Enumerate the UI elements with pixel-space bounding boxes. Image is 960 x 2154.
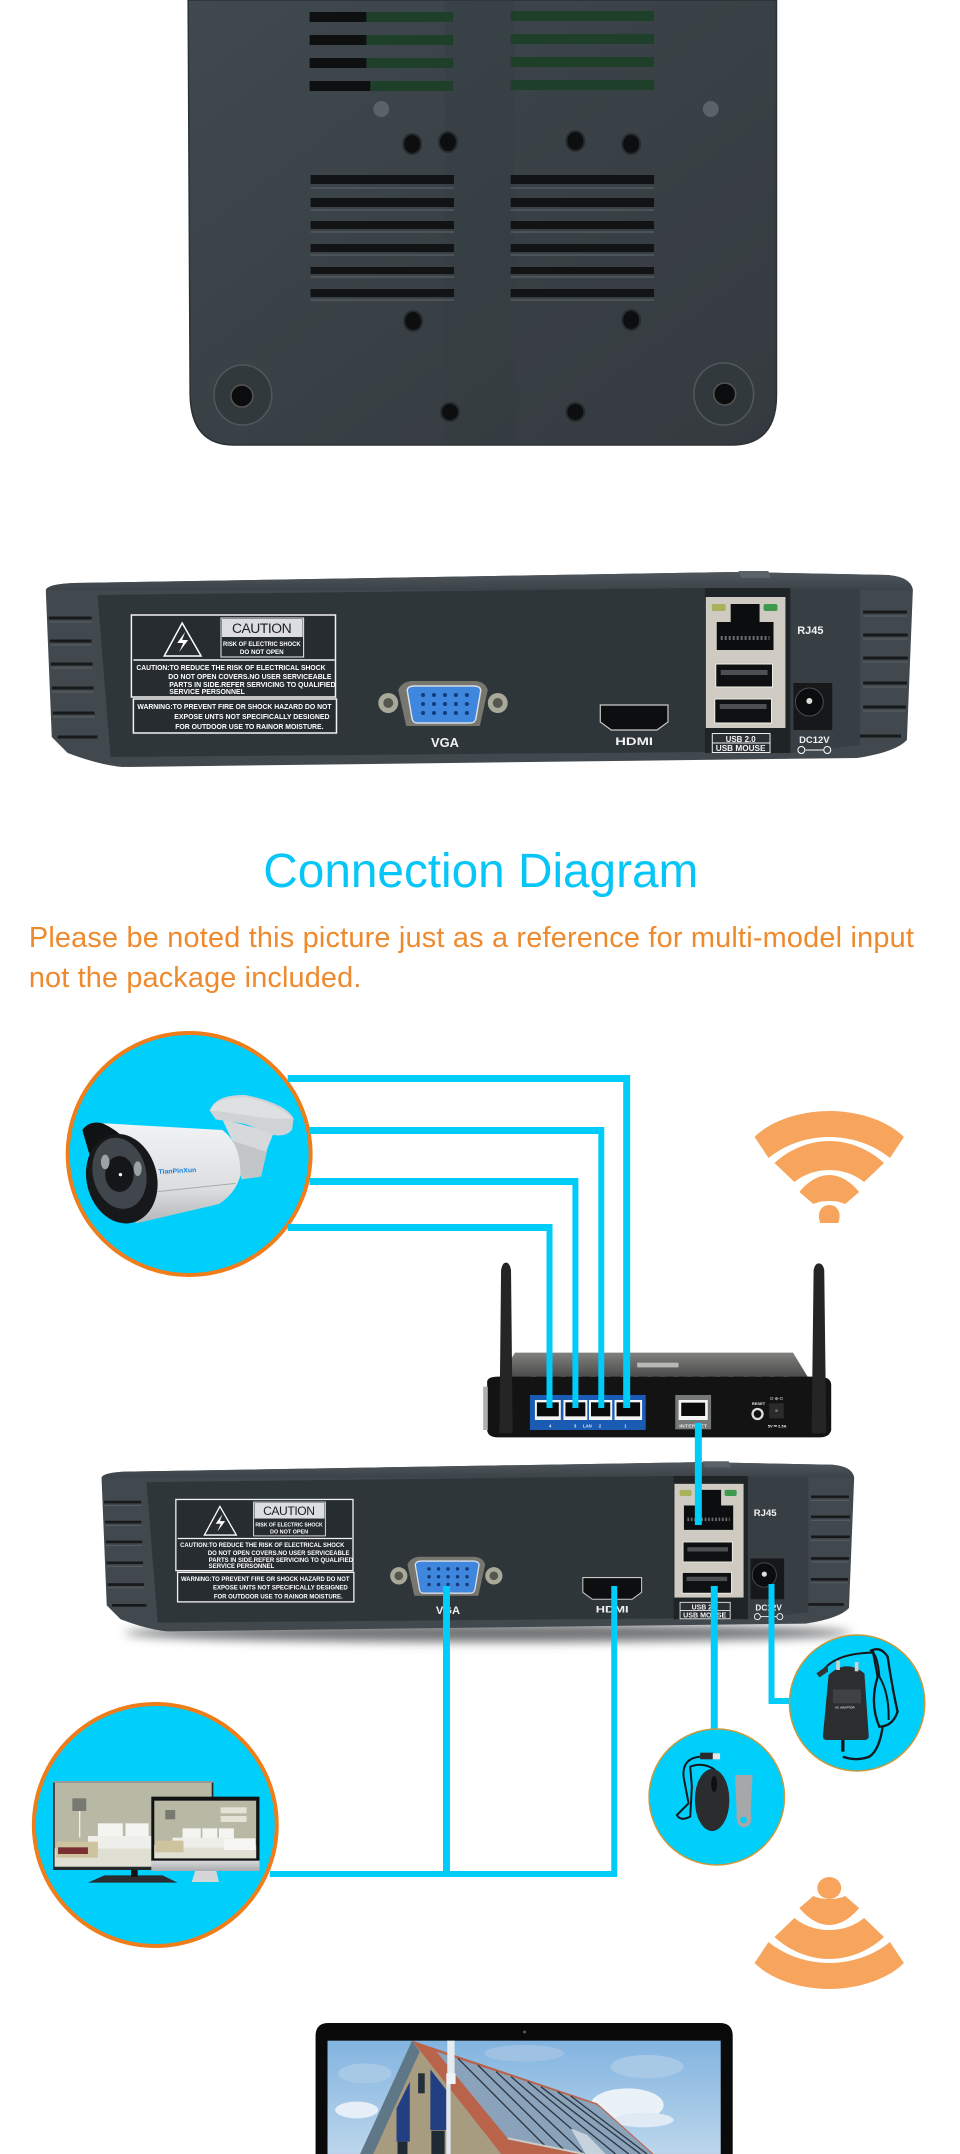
icon: bullet camera	[77, 1095, 294, 1231]
antenna left	[499, 1263, 513, 1433]
panel: NVR rear view	[46, 571, 913, 767]
DC 12V label: DC12V	[755, 1604, 782, 1613]
camera brand logo: TianPinXun	[158, 1167, 196, 1176]
rubber feet	[214, 363, 754, 425]
icon: wifi signal top	[755, 1111, 904, 1223]
DC 12V label	[798, 735, 831, 754]
HDMI label: HDMI	[615, 736, 653, 748]
upper vents	[310, 11, 654, 91]
caution label: PARTS IN SIDE.REFER SERVICING TO QUALIFIED	[169, 682, 335, 689]
caution label: DO NOT OPEN COVERS.NO USER SERVICEABLE	[168, 674, 332, 681]
caution label: DO NOT OPEN	[240, 649, 284, 656]
icon: monitors	[53, 1781, 259, 1883]
right grip	[807, 1497, 850, 1604]
mounting pegs	[373, 101, 719, 117]
caution label: WARNING:TO PREVENT FIRE OR SHOCK HAZARD DO NOT	[181, 1577, 350, 1583]
left grip	[104, 1502, 146, 1605]
VGA port	[390, 1557, 502, 1596]
reset and power: RESET	[752, 1401, 766, 1406]
antenna right	[812, 1263, 826, 1433]
note text	[29, 922, 914, 994]
caution label	[131, 615, 336, 733]
icon: wifi signal bottom	[755, 1877, 904, 1989]
LAN ports: LAN	[583, 1424, 592, 1429]
panel: NVR rear view in diagram	[102, 1461, 854, 1631]
USB label: USB 2.0	[692, 1605, 718, 1612]
reset and power: O-⊕-O	[770, 1396, 784, 1401]
caution label: DO NOT OPEN COVERS.NO USER SERVICEABLE	[208, 1551, 350, 1557]
back plate	[98, 588, 705, 757]
back plate	[146, 1476, 674, 1623]
caution label: FOR OUTDOOR USE TO RAINOR MOISTURE.	[214, 1594, 343, 1600]
USB cable	[711, 1586, 718, 1729]
USB label: USB MOUSE	[716, 744, 766, 753]
reset and power	[752, 1396, 787, 1429]
power socket	[793, 683, 832, 730]
monitor circle	[34, 1704, 277, 1946]
screen photo	[328, 2041, 721, 2154]
camera circle	[68, 1033, 311, 1275]
USB label: USB MOUSE	[683, 1612, 727, 1620]
VGA label: VGA	[436, 1605, 460, 1617]
panel: NVR shadow	[124, 1624, 851, 1642]
RJ45 label: RJ45	[754, 1508, 777, 1519]
caution label: RISK OF ELECTRIC SHOCK	[255, 1522, 323, 1528]
screw holes	[403, 131, 640, 421]
left grip	[49, 618, 98, 737]
caution label: CAUTION:TO REDUCE THE RISK OF ELECTRICAL SHOCK	[136, 665, 326, 672]
LAN ports	[530, 1395, 646, 1430]
power adapter circle	[789, 1635, 925, 1771]
caution label: PARTS IN SIDE.REFER SERVICING TO QUALIFIED	[209, 1558, 354, 1564]
LAN ports: 3	[574, 1424, 577, 1429]
caution label: CAUTION	[263, 1504, 315, 1518]
right grip	[858, 612, 908, 736]
port plate	[674, 1484, 744, 1598]
note text: Please be noted this picture just as a reference for multi-model input	[29, 922, 914, 954]
LAN ports: 4	[549, 1424, 552, 1429]
LAN ports: 2	[599, 1424, 602, 1429]
laptop with house photo	[316, 2023, 733, 2154]
LAN ports: 1	[624, 1424, 627, 1429]
icon: mouse and USB drive	[677, 1753, 753, 1831]
DC 12V label	[754, 1604, 783, 1620]
VGA label: VGA	[431, 735, 460, 750]
caution label: SERVICE PERSONNEL	[209, 1564, 275, 1570]
caution label: CAUTION:TO REDUCE THE RISK OF ELECTRICAL SHOCK	[180, 1543, 345, 1549]
USB label	[712, 734, 770, 753]
HDMI port	[600, 705, 668, 730]
internet port: INTERNET	[679, 1424, 708, 1429]
HDMI label: HDMI	[596, 1604, 629, 1615]
router to NVR cable	[695, 1423, 702, 1525]
USB label: USB 2.0	[726, 735, 756, 744]
note text: not the package included.	[29, 962, 361, 994]
panel: NVR underside photo	[188, 0, 776, 445]
HDMI port	[583, 1578, 642, 1599]
port plate	[706, 597, 785, 728]
lower vents	[311, 175, 654, 300]
caution label: DO NOT OPEN	[270, 1529, 308, 1535]
reset and power: 5V ⎓ 2.5A	[768, 1424, 787, 1429]
DC 12V label: DC12V	[799, 735, 830, 746]
camera to router cables	[288, 1075, 630, 1408]
power socket	[750, 1558, 784, 1599]
caution label: EXPOSE UNTS NOT SPECIFICALLY DESIGNED	[213, 1586, 348, 1592]
internet port	[675, 1395, 711, 1429]
USB label	[680, 1602, 730, 1620]
caution label: FOR OUTDOOR USE TO RAINOR MOISTURE.	[175, 724, 324, 731]
icon: power adapter: AC ADAPTOR	[835, 1706, 856, 1710]
caution label: SERVICE PERSONNEL	[169, 689, 246, 696]
title: Connection Diagram	[263, 845, 698, 898]
power cable	[769, 1584, 791, 1704]
display cables	[270, 1586, 617, 1877]
caution label: RISK OF ELECTRIC SHOCK	[223, 641, 301, 648]
caution label: WARNING:TO PREVENT FIRE OR SHOCK HAZARD DO NOT	[137, 704, 332, 711]
caution label: CAUTION	[232, 620, 292, 636]
caution label	[176, 1499, 354, 1602]
router	[483, 1263, 831, 1437]
RJ45 label: RJ45	[797, 625, 823, 637]
mouse circle	[649, 1729, 784, 1865]
side plate	[790, 589, 860, 753]
VGA port	[378, 681, 508, 726]
side plate	[748, 1477, 808, 1619]
caution label: EXPOSE UNTS NOT SPECIFICALLY DESIGNED	[174, 714, 330, 721]
